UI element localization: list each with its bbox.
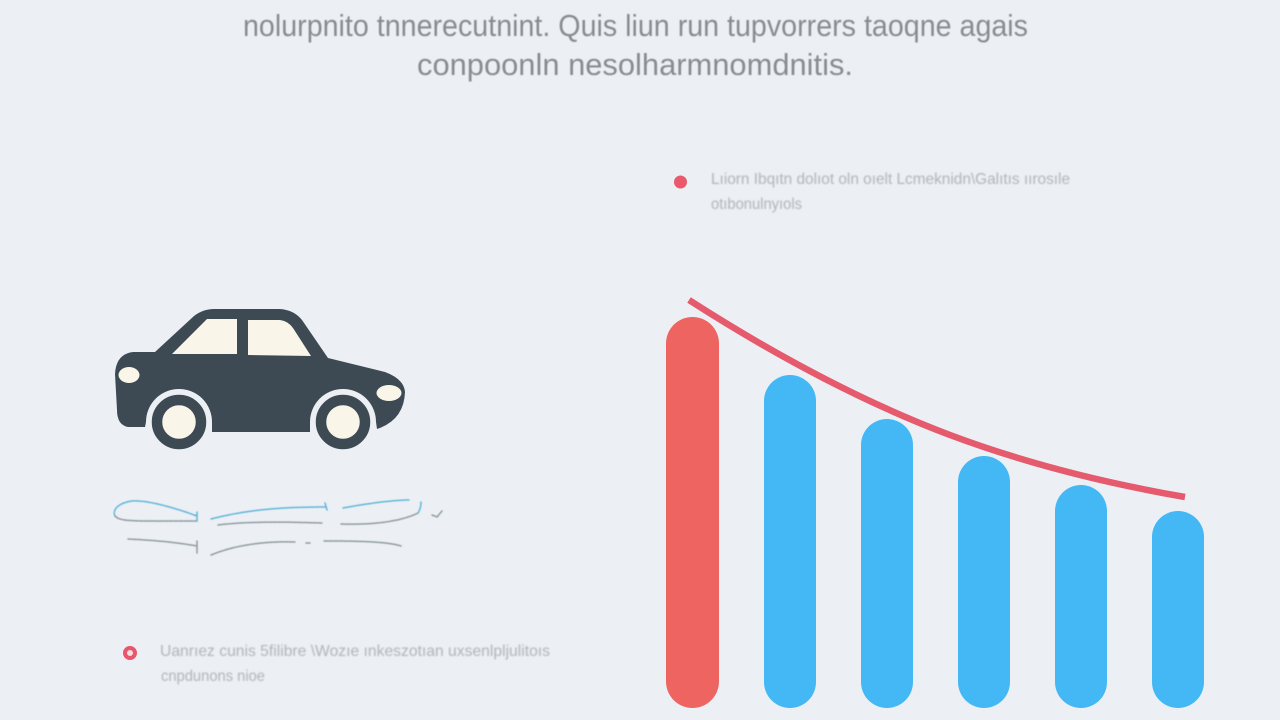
icon: car right window (248, 320, 311, 356)
title text: nolurpnito tnnerecutnint. Quis liun run tupvorrers taoqne agais (243, 8, 1028, 43)
bar 3 (861, 419, 913, 708)
bar chart (666, 300, 1204, 708)
bar 5 (1055, 485, 1107, 708)
text block: upper note: otıbonulnyıols (711, 196, 802, 213)
bar 2 (764, 375, 816, 708)
icon: front light (376, 385, 402, 401)
text block: upper note (711, 171, 1070, 213)
text block: lower note: Uanrıez cunis 5filibre \Wozıe ınkeszotıan uxsenlpljulitoıs (160, 643, 550, 660)
icon: rear wheel (157, 400, 201, 444)
icon: lower bullet (125, 648, 135, 658)
text block: upper note: Lıiorn Ibqıtn dolıot oln oıelt Lcmeknidn\Galıtıs ıırosıle (711, 171, 1070, 188)
text block: lower note (160, 643, 550, 685)
icon: rear light (118, 367, 140, 383)
icon: front wheel (321, 400, 365, 444)
icon: car left window (172, 319, 237, 354)
motion lines (114, 500, 442, 555)
callout: upper right (674, 171, 1070, 213)
trend line (689, 300, 1185, 497)
title text (243, 8, 1028, 82)
bar 4 (958, 456, 1010, 708)
panel: car illustration (115, 309, 405, 444)
bar 6 (1152, 511, 1204, 708)
icon: car body (115, 309, 405, 432)
callout: lower left (125, 643, 550, 685)
icon: upper bullet (674, 176, 687, 188)
text block: lower note: cnpdunons nioe (161, 668, 265, 685)
bar 1 red (666, 317, 719, 708)
title text: conpoonln nesolharmnomdnitis. (417, 47, 853, 82)
